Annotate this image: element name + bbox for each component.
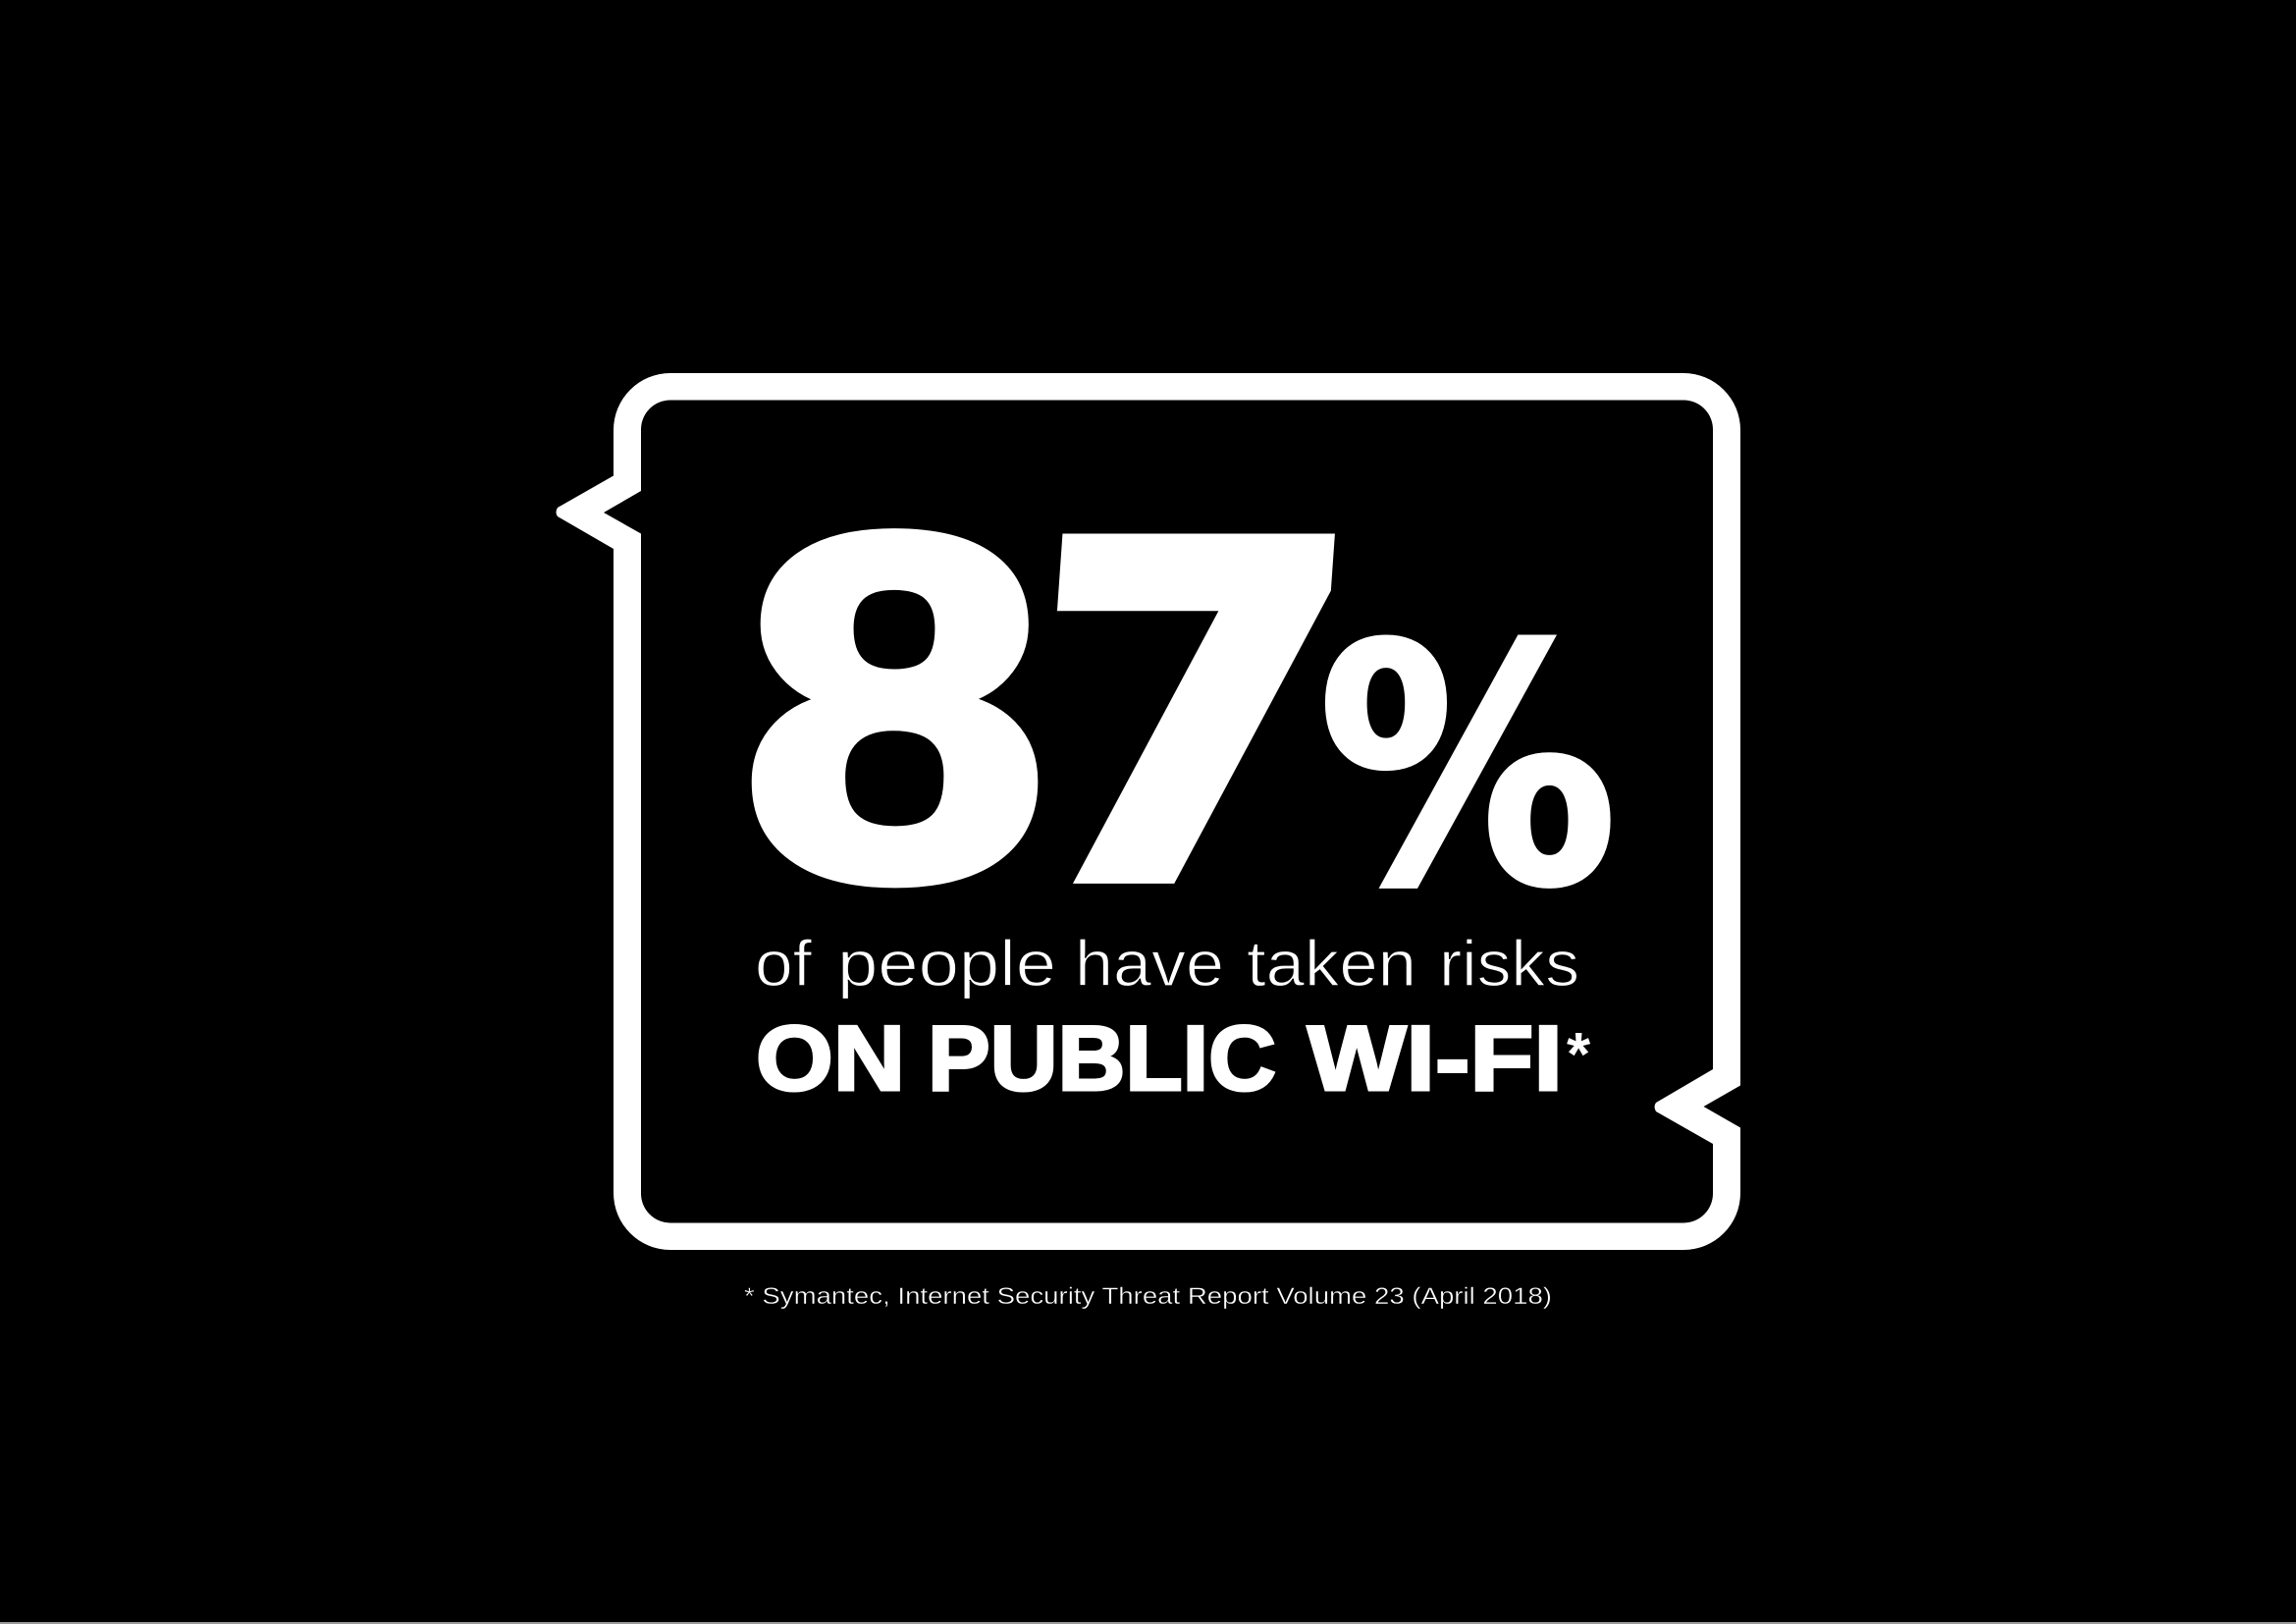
emphasised line: on public wi-fi: ON	[756, 1006, 905, 1110]
speech bubble frame	[556, 373, 1740, 1250]
percent sign: %	[1318, 578, 1617, 958]
subheading line	[755, 927, 1579, 1000]
subheading line: of	[755, 927, 813, 1000]
emphasised line: on public wi-fi: WI-FI	[1308, 1006, 1563, 1110]
source footnote: * Symantec, Internet Security Threat Report Volume 23 (April 2018)	[744, 1283, 1552, 1310]
subheading line: taken	[1247, 927, 1416, 1000]
emphasised line: on public wi-fi	[756, 1006, 1591, 1110]
subheading line: have	[1075, 927, 1224, 1000]
footnote asterisk: *	[1567, 1021, 1591, 1089]
headline figure: 87%	[742, 435, 1617, 987]
digit 8: 8	[742, 435, 1046, 979]
digit 7: 7	[1006, 450, 1371, 987]
emphasised line: on public wi-fi: PUBLIC	[928, 1006, 1276, 1110]
subheading line: risks	[1439, 927, 1579, 1000]
subheading line: people	[837, 927, 1056, 1000]
